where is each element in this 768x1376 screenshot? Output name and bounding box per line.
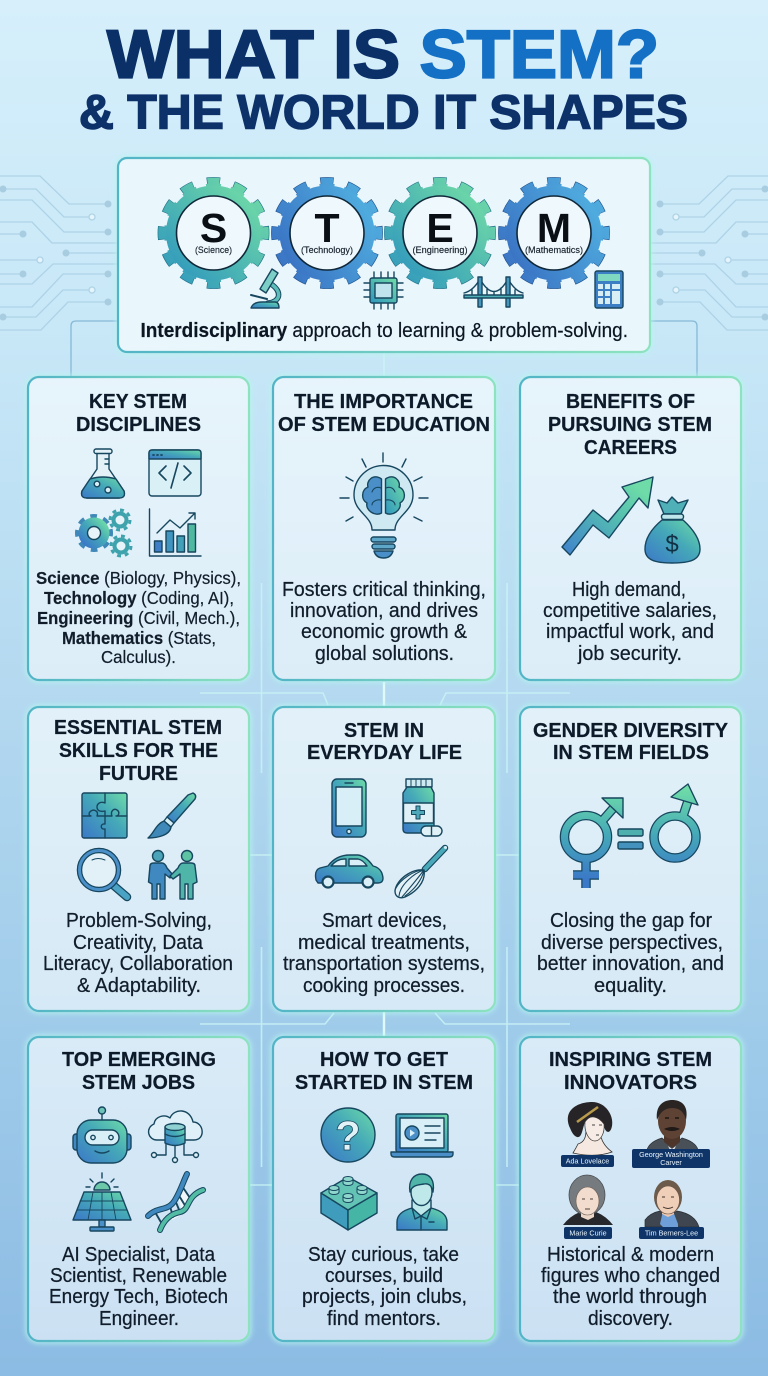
icon: light bulb with brain	[340, 453, 428, 558]
icon: gender equality symbols	[564, 784, 698, 888]
gear S: S	[200, 205, 227, 251]
body text: Fosters critical thinking,	[282, 579, 486, 601]
name label: Ada Lovelace: Ada Lovelace	[566, 1156, 609, 1166]
name label: George Washington Carver: Carver	[660, 1158, 682, 1167]
body text: better innovation, and	[537, 953, 724, 975]
heading	[307, 719, 462, 764]
body text: figures who changed	[541, 1265, 720, 1287]
heading: GENDER DIVERSITY	[533, 719, 728, 742]
heading: EVERYDAY LIFE	[307, 741, 462, 764]
portrait: Tim Berners-Lee	[645, 1180, 699, 1227]
gear M	[503, 182, 605, 284]
heading: ESSENTIAL STEM	[54, 716, 222, 739]
card frame	[520, 377, 741, 680]
icon: microscope	[251, 269, 279, 308]
panel: STEM definition	[118, 158, 650, 352]
body text: courses, build	[325, 1265, 443, 1287]
icon: mentor person	[397, 1174, 447, 1230]
card frame	[273, 707, 495, 1011]
icon: question mark	[321, 1108, 375, 1162]
body text: Historical & modern	[547, 1244, 714, 1266]
panel: top emerging stem jobs	[28, 1037, 249, 1341]
body text: High demand,	[572, 579, 686, 601]
body text: AI Specialist, Data	[62, 1244, 216, 1266]
body text: the world through	[553, 1286, 707, 1308]
circuit pattern right	[651, 176, 768, 330]
body text: find mentors.	[327, 1308, 441, 1330]
body text: Engineering (Civil, Mech.),	[37, 608, 240, 628]
connector lines	[71, 321, 697, 1185]
icon: flask	[82, 449, 124, 498]
body text	[49, 1244, 228, 1330]
body text: transportation systems,	[283, 953, 485, 975]
body text	[302, 1244, 467, 1330]
icon: code window	[149, 450, 201, 496]
icon: money bag: $	[665, 531, 679, 558]
body text: Smart devices,	[322, 910, 447, 932]
name label: George Washington Carver: George Washington	[639, 1150, 703, 1159]
circuit pattern left	[0, 176, 117, 330]
icon: robot	[73, 1107, 131, 1163]
panel: how to get started	[273, 1037, 495, 1341]
card frame	[273, 377, 495, 680]
heading	[54, 716, 222, 785]
body text: job security.	[577, 643, 682, 665]
heading: STARTED IN STEM	[295, 1071, 473, 1094]
heading: INSPIRING STEM	[549, 1048, 712, 1071]
icon: puzzle	[82, 793, 127, 838]
panel: importance of stem education	[273, 377, 495, 680]
body text: innovation, and drives	[290, 600, 478, 622]
body text: Creativity, Data	[73, 932, 204, 954]
icon: cloud database	[149, 1111, 202, 1162]
panel: benefits of stem careers	[520, 377, 741, 680]
body text: economic growth &	[301, 621, 468, 643]
body text: equality.	[594, 975, 667, 997]
gear M: M	[537, 205, 571, 251]
portrait: George Washington Carver	[647, 1100, 698, 1150]
title line 1: WHAT IS STEM?	[107, 16, 659, 92]
body text	[283, 910, 485, 997]
heading	[548, 390, 712, 459]
panel: key stem disciplines	[28, 377, 249, 680]
heading: CAREERS	[584, 436, 677, 459]
card frame	[520, 1037, 741, 1341]
heading: STEM IN	[344, 719, 424, 742]
body text: & Adaptability.	[77, 975, 201, 997]
name label: Tim Berners-Lee: Tim Berners-Lee	[645, 1228, 698, 1238]
body text: Technology (Coding, AI),	[44, 588, 234, 608]
icon: magnifier	[80, 850, 127, 897]
body text	[36, 568, 241, 667]
icon: paint brush	[148, 793, 196, 838]
icon: whisk	[395, 846, 447, 898]
icon: question mark: ?	[335, 1112, 361, 1159]
body text: Scientist, Renewable	[50, 1265, 227, 1287]
body text: Science (Biology, Physics),	[36, 568, 241, 588]
name label: Marie Curie: Marie Curie	[569, 1228, 607, 1238]
name label: Marie Curie	[564, 1227, 612, 1239]
heading	[295, 1048, 473, 1094]
heading: STEM JOBS	[82, 1071, 195, 1094]
body text: cooking processes.	[303, 975, 465, 997]
heading: PURSUING STEM	[548, 413, 712, 436]
icon: bar chart	[150, 509, 201, 556]
body text: Stay curious, take	[308, 1244, 459, 1266]
heading: INNOVATORS	[564, 1071, 697, 1094]
card frame	[28, 707, 249, 1011]
icon: gears	[77, 510, 131, 556]
card frame	[273, 1037, 495, 1341]
heading: TOP EMERGING	[62, 1048, 216, 1071]
icon: microchip	[364, 272, 403, 309]
title line 2: & THE WORLD IT SHAPES	[79, 86, 688, 140]
heading: THE IMPORTANCE	[294, 390, 473, 413]
name label: George Washington Carver	[632, 1149, 710, 1168]
portrait: Ada Lovelace	[568, 1102, 612, 1155]
heading: BENEFITS OF	[566, 390, 695, 413]
body text: discovery.	[588, 1308, 673, 1330]
body text	[43, 910, 233, 997]
heading: KEY STEM	[89, 390, 187, 413]
icon: DNA helix	[148, 1174, 203, 1230]
gear E: (Engineering)	[412, 245, 468, 255]
body text: impactful work, and	[546, 621, 714, 643]
gear T: (Technology)	[301, 245, 353, 255]
heading: HOW TO GET	[320, 1048, 448, 1071]
heading	[62, 1048, 216, 1094]
icon: rising arrow	[562, 477, 653, 555]
heading: SKILLS FOR THE	[59, 739, 218, 762]
heading	[533, 719, 728, 764]
card frame	[28, 1037, 249, 1341]
gear M: (Mathematics)	[525, 245, 583, 255]
card frame	[28, 377, 249, 680]
name label: Tim Berners-Lee	[639, 1227, 704, 1239]
heading	[549, 1048, 712, 1094]
panel frame	[118, 158, 650, 352]
icon: calculator	[595, 271, 623, 308]
body text: Closing the gap for	[550, 910, 712, 932]
portrait: Marie Curie	[563, 1175, 613, 1225]
body text: Literacy, Collaboration	[43, 953, 233, 975]
heading: OF STEM EDUCATION	[278, 413, 490, 436]
gear S: (Science)	[195, 245, 232, 255]
body text: competitive salaries,	[543, 600, 717, 622]
icon: medicine bottle	[403, 779, 442, 836]
icon: smartphone	[332, 779, 366, 837]
body text: Calculus).	[101, 647, 176, 667]
body text	[541, 1244, 720, 1330]
body text	[537, 910, 724, 997]
heading: FUTURE	[99, 762, 178, 785]
body text	[543, 579, 717, 665]
icon: laptop video course	[391, 1114, 453, 1157]
body text: diverse perspectives,	[541, 932, 723, 954]
name label: Ada Lovelace	[561, 1155, 614, 1167]
body text: Mathematics (Stats,	[62, 628, 216, 648]
panel: stem in everyday life	[273, 707, 495, 1011]
heading	[278, 390, 490, 436]
icon: solar panel	[73, 1173, 131, 1231]
card frame	[520, 707, 741, 1011]
body text: projects, join clubs,	[302, 1286, 467, 1308]
panel: inspiring stem innovators	[520, 1037, 741, 1341]
body text: global solutions.	[315, 643, 454, 665]
heading: IN STEM FIELDS	[553, 741, 709, 764]
heading	[76, 390, 201, 436]
title	[79, 16, 688, 140]
icon: collaboration	[148, 850, 197, 899]
body text	[282, 579, 486, 665]
heading: DISCIPLINES	[76, 413, 201, 436]
body text: Engineer.	[99, 1308, 179, 1330]
body text: Energy Tech, Biotech	[49, 1286, 228, 1308]
icon: car	[316, 855, 383, 888]
panel: gender diversity	[520, 707, 741, 1011]
icon: bridge	[464, 277, 523, 307]
gear E: E	[426, 205, 454, 251]
gear S	[162, 182, 265, 284]
panel: essential stem skills	[28, 707, 249, 1011]
body text: Problem-Solving,	[66, 910, 212, 932]
gear E	[389, 182, 491, 284]
icon: money bag	[645, 497, 700, 563]
icon: building block	[321, 1176, 377, 1230]
body text: medical treatments,	[298, 932, 470, 954]
STEM definition text: Interdisciplinary approach to learning & problem-solving.	[140, 320, 628, 342]
gear T	[276, 182, 378, 284]
gear T: T	[314, 205, 340, 251]
